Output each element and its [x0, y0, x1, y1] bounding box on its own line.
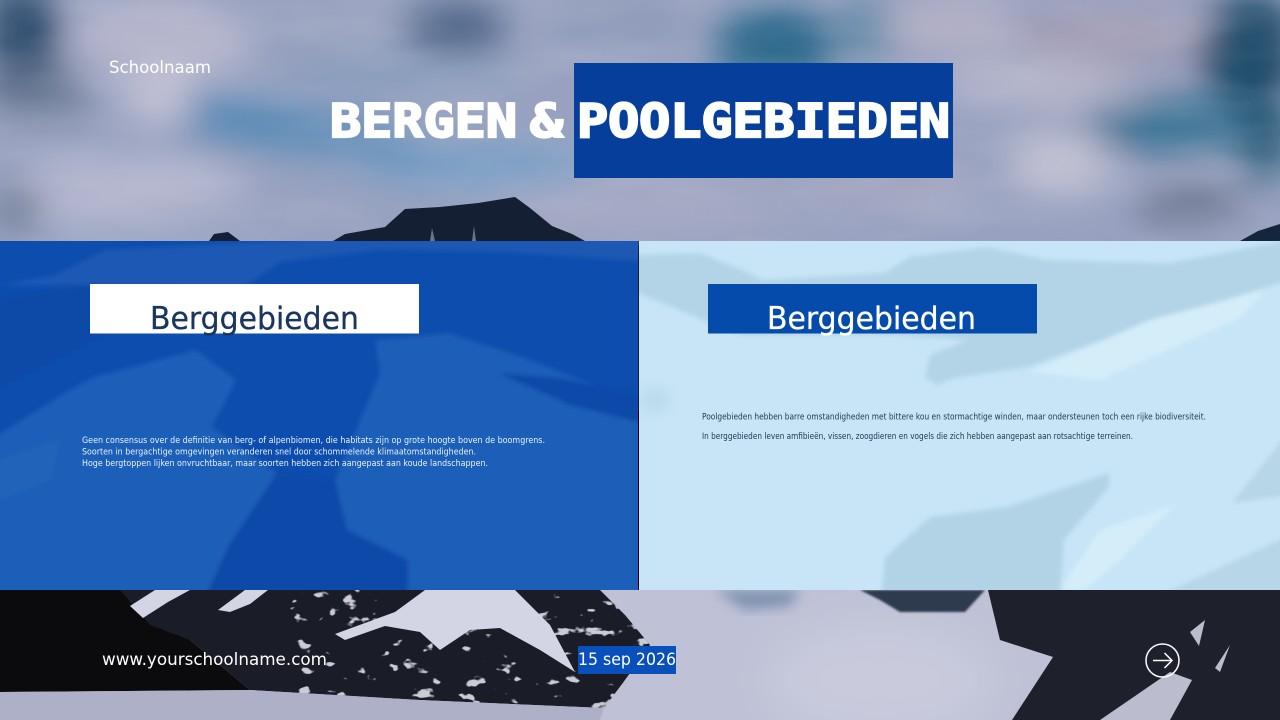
right body text: In berggebieden leven amfibieën, vissen, zoogdieren en vogels die zich hebben aangepast aan rotsachtige terreinen. — [702, 432, 1133, 442]
title: BERGEN — [330, 94, 517, 148]
panel divider — [638, 241, 640, 410]
panel: right pale blue glacier panel — [630, 240, 1280, 600]
title: POOLGEBIEDEN — [577, 94, 950, 148]
panel: left blue mountain panel — [0, 238, 650, 600]
left heading — [90, 284, 419, 337]
left body text: Geen consensus over de definitie van berg- of alpenbiomen, die habitats zijn op grote hoogte boven de boomgrens. — [82, 436, 545, 446]
background photo: cloudy sky — [0, 0, 1280, 245]
left heading: Berggebieden — [150, 301, 359, 337]
website: www.yourschoolname.com — [102, 650, 327, 670]
school name: Schoolnaam — [109, 58, 211, 78]
right body text: Poolgebieden hebben barre omstandigheden met bittere kou en stormachtige winden, maar ondersteunen toch een rijke biodiversiteit. — [702, 412, 1206, 422]
title: & — [530, 94, 563, 148]
distant peaks — [333, 197, 585, 241]
icon: arrow in circle — [1146, 644, 1179, 677]
right body text — [702, 412, 1206, 442]
right heading: Berggebieden — [767, 301, 976, 337]
right heading — [708, 284, 1037, 337]
left body text: Hoge bergtoppen lijken onvruchtbaar, maar soorten hebben zich aangepast aan koude landschappen. — [82, 459, 488, 469]
title highlight box — [574, 63, 953, 178]
left body text: Soorten in bergachtige omgevingen veranderen snel door schommelende klimaatomstandigheden. — [82, 448, 476, 458]
background photo: snowy glacier foreground — [0, 590, 1280, 720]
date — [578, 646, 676, 674]
title — [330, 94, 950, 148]
left body text — [82, 436, 545, 469]
date: 15 sep 2026 — [578, 650, 676, 670]
